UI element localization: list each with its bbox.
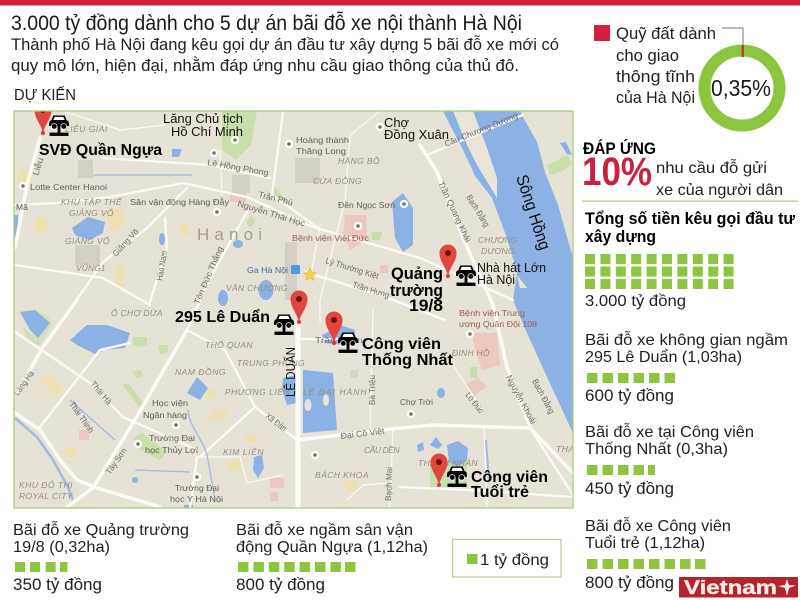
map: place labels: Bệnh viện Trung bbox=[459, 308, 525, 318]
map: points of interest bbox=[19, 123, 474, 481]
item: SVĐ Quần Ngựa bbox=[236, 520, 428, 594]
icon: station bbox=[291, 265, 300, 274]
item: Quảng trường 19/8: Bãi đỗ xe Quảng trường bbox=[13, 520, 189, 539]
label: Chợ Đồng Xuân: Chợ bbox=[384, 115, 409, 130]
map: place labels: PHƯƠNG LIÊN bbox=[225, 387, 290, 397]
item: 295 Lê Duẩn: 600 tỷ đồng bbox=[585, 386, 674, 405]
map: place labels: Đại Cồ Việt bbox=[340, 426, 386, 441]
label: Lăng Chủ tịch Hồ Chí Minh: Hồ Chí Minh bbox=[171, 124, 243, 139]
map: place labels: Nguyễn Khoái bbox=[504, 373, 538, 426]
map: place labels: THANH NHÀN bbox=[418, 458, 478, 468]
label: Quảng trường 19/8: trường bbox=[390, 281, 443, 300]
map: place labels: LÊ ĐẠI HÀNH bbox=[303, 387, 367, 397]
icon: star bbox=[304, 268, 316, 280]
label: Nhà hát Lớn Hà Nội: Nhà hát Lớn bbox=[477, 261, 546, 275]
heading: total investment: xây dựng bbox=[585, 227, 656, 246]
stat: 10% demand: ĐÁP ỨNG bbox=[583, 139, 656, 158]
map: place labels: THA bbox=[556, 444, 574, 454]
label: Lăng Chủ tịch Hồ Chí Minh bbox=[164, 113, 242, 136]
map: place labels: NAM ĐỒNG bbox=[175, 366, 226, 377]
map: place labels: Lotte Center Hanoi bbox=[30, 182, 107, 192]
map: place labels: Trường Đại bbox=[149, 433, 195, 443]
item: Quảng trường 19/8: 350 tỷ đồng bbox=[13, 575, 102, 594]
pin: Công viên Thống Nhất bbox=[326, 312, 358, 353]
item: SVĐ Quần Ngựa: 800 tỷ đồng bbox=[236, 575, 325, 594]
pin: Quảng trường 19/8 bbox=[440, 244, 476, 286]
map: place labels: Bạch Mai bbox=[383, 467, 394, 501]
map: place labels: Trần Quang Khải bbox=[436, 180, 473, 244]
map: place labels: Tây Sơn bbox=[103, 446, 129, 476]
label: Công viên Tuổi trẻ: Công viên bbox=[471, 469, 548, 486]
map: roads bbox=[15, 110, 573, 508]
item: SVĐ Quần Ngựa: động Quần Ngựa (1,12ha) bbox=[236, 539, 428, 556]
item: Công viên Tuổi trẻ: Tuổi trẻ (1,12ha) bbox=[585, 534, 705, 552]
item: Công viên Thống Nhất bbox=[585, 422, 754, 498]
map: place labels: Bệnh viện Việt Đức bbox=[292, 233, 370, 243]
legend: land share: thông tĩnh bbox=[616, 67, 695, 86]
label: Nhà hát Lớn Hà Nội: Hà Nội bbox=[477, 273, 515, 287]
donut chart bbox=[704, 28, 780, 126]
map: river and lakes bbox=[14, 111, 573, 508]
stat: 10% demand bbox=[582, 139, 783, 199]
item: Công viên Thống Nhất: 450 tỷ đồng bbox=[585, 479, 674, 498]
map: place labels: Hào Nam bbox=[154, 250, 169, 281]
map: place labels: HÀNG BÔ bbox=[338, 156, 380, 166]
map: place labels: Liễu bbox=[30, 156, 46, 177]
map: place labels bbox=[11, 110, 575, 504]
map: place labels: Sân vận động Hàng Đẫy bbox=[130, 197, 230, 207]
item: Công viên Tuổi trẻ bbox=[585, 516, 731, 592]
value: 3.000 tỷ đồng: 3.000 tỷ đồng bbox=[585, 293, 686, 310]
map: place labels: LIỄU GIAI bbox=[65, 123, 108, 134]
legend: land share bbox=[594, 24, 716, 107]
donut chart: 0,35% bbox=[711, 75, 771, 101]
label: Chợ Đồng Xuân bbox=[384, 118, 448, 142]
label: 295 Lê Duẩn: 295 Lê Duẩn bbox=[175, 308, 270, 326]
map: place labels: Cầu Chương Dương bbox=[443, 110, 519, 149]
label: Công viên Thống Nhất bbox=[362, 336, 454, 369]
map: place labels: Học viện bbox=[152, 398, 188, 408]
map: place labels: TRUNG PHỤNG bbox=[237, 358, 305, 368]
map heading: DỰ KIẾN bbox=[14, 85, 76, 104]
item: Công viên Thống Nhất: Bãi đỗ xe tại Công viên bbox=[585, 422, 754, 441]
map: place labels: Mã bbox=[16, 202, 28, 212]
map: place labels: VĂN CHƯƠNG bbox=[226, 283, 288, 293]
item: Quảng trường 19/8 bbox=[13, 520, 189, 594]
heading: total investment bbox=[585, 209, 796, 246]
logo: Vietnam+ bbox=[679, 577, 798, 599]
item: SVĐ Quần Ngựa: Bãi đỗ xe ngầm sân vận bbox=[236, 520, 413, 539]
pin: 295 Lê Duẩn bbox=[274, 290, 308, 335]
item: Quảng trường 19/8: 19/8 (0,32ha) bbox=[13, 539, 110, 556]
label: Công viên Thống Nhất: Công viên bbox=[362, 336, 441, 353]
label: Quảng trường 19/8 bbox=[390, 266, 442, 312]
map: place labels: Láng Hạ bbox=[11, 368, 36, 397]
item: 295 Lê Duẩn: Bãi đỗ xe không gian ngầm bbox=[585, 330, 788, 349]
map: place labels: Tôn Đức Thắng bbox=[192, 245, 225, 306]
map: place labels: Nguyễn Thái Học bbox=[236, 198, 307, 229]
label: Lăng Chủ tịch Hồ Chí Minh: Lăng Chủ tịch bbox=[163, 111, 243, 126]
map: place labels: ương Quân Đội 108 bbox=[459, 319, 537, 329]
label: Quảng trường 19/8: Quảng bbox=[391, 264, 443, 283]
map: place labels: Thái Hà bbox=[88, 379, 114, 407]
item: 295 Lê Duẩn: 295 Lê Duẩn (1,03ha) bbox=[585, 348, 742, 366]
map: parks and blocks bbox=[18, 111, 572, 501]
map: place labels: ĐINH HỒ bbox=[452, 347, 490, 358]
intro text bbox=[11, 35, 559, 75]
map: place labels: Lê Hồng Phong bbox=[207, 157, 270, 178]
item: Công viên Thống Nhất: Thống Nhất (0,3ha) bbox=[585, 441, 728, 458]
map: place labels: VŨNG1 bbox=[76, 263, 106, 273]
legend: 1 tỷ đồng: 1 tỷ đồng bbox=[480, 552, 549, 569]
title: 3.000 tỷ đồng dành cho 5 dự án bãi đỗ xe nội thành Hà Nội bbox=[11, 12, 522, 35]
pictogram: 3.000 tỷ đồng bbox=[585, 254, 734, 289]
pin: Công viên Tuổi trẻ bbox=[430, 454, 467, 487]
label: Công viên Tuổi trẻ: Tuổi trẻ bbox=[471, 483, 529, 501]
map: place labels: Thăng Long bbox=[296, 146, 346, 156]
label: Nhà hát Lớn Hà Nội bbox=[478, 262, 546, 286]
map: place labels: học Thủy Lợi bbox=[145, 445, 198, 455]
map: place labels: Đền Ngọc Sơn bbox=[338, 200, 395, 210]
map: place labels: Ga Hà Nội bbox=[247, 265, 288, 275]
map: place labels: Bạch Đằng bbox=[530, 377, 557, 416]
map: place labels: DƯƠNG bbox=[481, 246, 515, 256]
legend: land share: cho giao bbox=[616, 46, 679, 65]
map: place labels: Ngân hàng bbox=[143, 410, 187, 420]
map: place labels: Hoàng thành bbox=[296, 135, 349, 145]
intro text: quy mô lớn, hiện đại, nhằm đáp ứng nhu cầu giao thông của thủ đô. bbox=[11, 56, 519, 75]
stat: 10% demand: xe của người dân bbox=[656, 182, 783, 199]
label: Lê Duẩn road: LÊ DUẨN bbox=[283, 347, 298, 397]
panel: map bbox=[11, 102, 575, 508]
map: place labels: THỔ QUAN bbox=[205, 339, 253, 350]
label: Chợ Đồng Xuân: Đồng Xuân bbox=[384, 127, 449, 142]
map: place labels: Chợ Trời bbox=[400, 397, 433, 407]
item: Công viên Tuổi trẻ: Bãi đỗ xe Công viên bbox=[585, 516, 731, 535]
map: place labels: CẦU DỀN bbox=[364, 445, 400, 455]
map: place labels: CỬA ĐÔNG bbox=[313, 175, 362, 186]
map: place labels: KHU ĐÔ THỊ bbox=[19, 480, 73, 490]
map: sandbars and islands bbox=[304, 111, 527, 411]
map: place labels: Trường Đại bbox=[175, 483, 219, 493]
map: place labels: Hanoi bbox=[197, 225, 262, 244]
map: place labels: Trần Nhân bbox=[315, 335, 363, 345]
intro text: Thành phố Hà Nội đang kêu gọi dự án đầu tư xây dựng 5 bãi đỗ xe mới có bbox=[11, 35, 559, 54]
legend: land share: Quỹ đất dành bbox=[616, 24, 716, 43]
logo: Vietnam+: Vietnam bbox=[684, 578, 777, 599]
pin: SVĐ Quần Ngựa bbox=[34, 112, 69, 136]
map: place labels: GIẢNG VÕ bbox=[69, 207, 114, 218]
map: place labels: Trần Hưng bbox=[351, 279, 391, 300]
map: place labels: học Y Hà Nội bbox=[170, 494, 223, 504]
map: place labels: CHƯƠNG bbox=[478, 235, 518, 245]
map: place labels: Ô CHỢ DỪA bbox=[111, 308, 163, 318]
map: place labels: Bà Triệu bbox=[367, 375, 377, 405]
map: place labels: Giảng Võ bbox=[110, 226, 141, 258]
label: SVĐ Quần Ngựa: SVĐ Quần Ngựa bbox=[39, 142, 162, 159]
map: place labels: Lý Thường Kiệt bbox=[324, 255, 380, 281]
label: Quảng trường 19/8: 19/8 bbox=[409, 296, 443, 315]
stat: 10% demand: 10% bbox=[582, 150, 652, 194]
map: place labels: Trần Phú bbox=[258, 189, 294, 207]
label: Công viên Tuổi trẻ bbox=[471, 470, 547, 497]
item: 295 Lê Duẩn bbox=[585, 330, 788, 405]
map: place labels: Thái Thịnh bbox=[67, 399, 96, 435]
legend: 1 tỷ đồng bbox=[452, 540, 561, 577]
legend: land share: của Hà Nội bbox=[616, 88, 695, 107]
map: place labels: Xã Đàn bbox=[264, 411, 289, 433]
map: place labels: GIẢNG VÕ bbox=[65, 235, 110, 246]
item: Công viên Tuổi trẻ: 800 tỷ đồng bbox=[585, 573, 674, 592]
label: Công viên Thống Nhất: Thống Nhất bbox=[362, 352, 454, 369]
map: place labels: Lò Đúc bbox=[463, 390, 486, 416]
map: place labels: KIM LIÊN bbox=[223, 447, 264, 457]
map: place labels: ROYAL CITY bbox=[19, 491, 74, 501]
label: Sông Hồng: Sông Hồng bbox=[512, 172, 554, 252]
stat: 10% demand: nhu cầu đỗ gửi bbox=[656, 158, 767, 177]
map: place labels: KHU TẬP THỂ bbox=[61, 196, 122, 207]
map: place labels: BÁCH KHOA bbox=[315, 470, 369, 480]
map: place labels: Bạch Đằng bbox=[464, 193, 492, 229]
top red bar bbox=[0, 0, 800, 6]
